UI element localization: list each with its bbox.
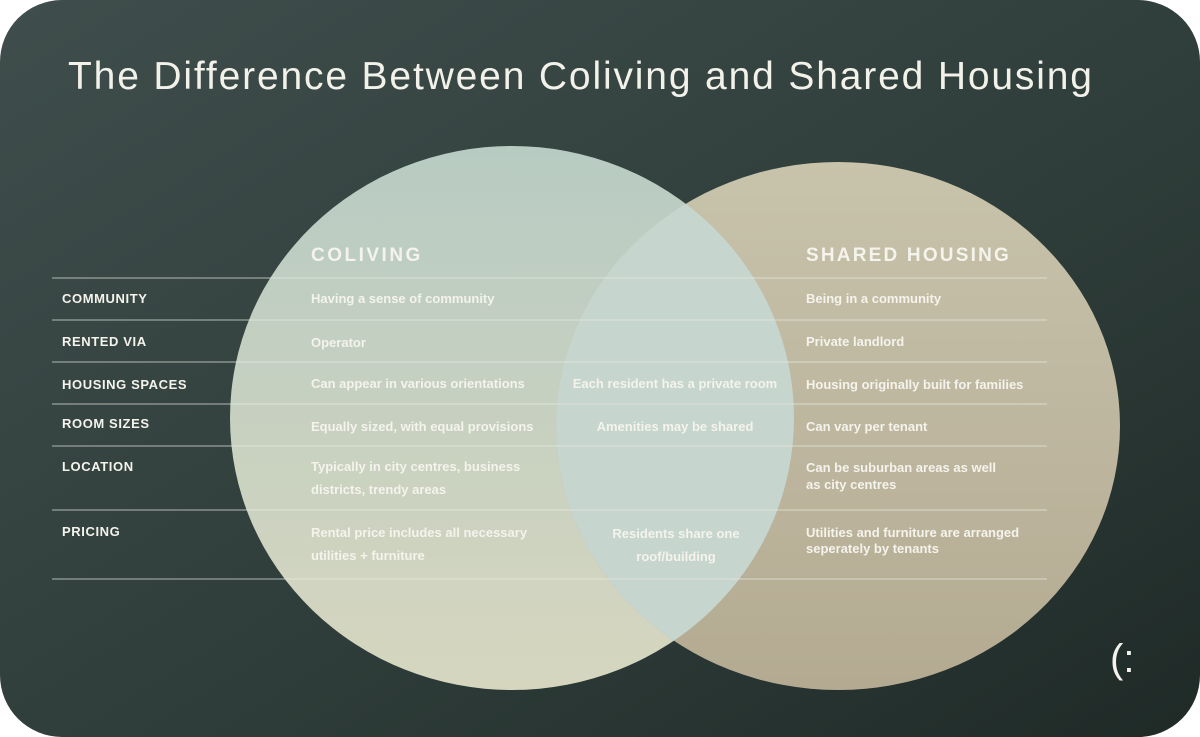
heading: coliving: COLIVING bbox=[311, 245, 423, 266]
shared housing column bbox=[806, 291, 1023, 556]
row labels: HOUSING SPACES bbox=[62, 377, 187, 392]
heading: shared housing: SHARED HOUSING bbox=[806, 245, 1011, 266]
coliving column: Operator bbox=[311, 335, 366, 350]
table lines bbox=[52, 278, 1047, 579]
shared housing column: Being in a community bbox=[806, 291, 942, 306]
coliving column: utilities + furniture bbox=[311, 548, 425, 563]
coliving column: districts, trendy areas bbox=[311, 482, 446, 497]
shared housing column: Private landlord bbox=[806, 334, 904, 349]
coliving column: Equally sized, with equal provisions bbox=[311, 419, 534, 434]
circle: coliving bbox=[230, 146, 794, 690]
shared column (overlap): roof/building bbox=[636, 549, 716, 564]
shared column (overlap): Each resident has a private room bbox=[573, 376, 777, 391]
row labels: RENTED VIA bbox=[62, 334, 147, 349]
shared column (overlap): Residents share one bbox=[612, 526, 740, 541]
shared housing column: Housing originally built for families bbox=[806, 377, 1023, 392]
shared housing column: as city centres bbox=[806, 477, 896, 492]
shared housing column: seperately by tenants bbox=[806, 541, 939, 556]
row labels bbox=[62, 291, 187, 539]
shared housing column: Utilities and furniture are arranged bbox=[806, 525, 1019, 540]
row labels: PRICING bbox=[62, 524, 120, 539]
shared housing column: Can vary per tenant bbox=[806, 419, 928, 434]
row labels: COMMUNITY bbox=[62, 291, 148, 306]
logo: (: bbox=[1110, 637, 1134, 681]
row labels: ROOM SIZES bbox=[62, 416, 150, 431]
coliving column: Having a sense of community bbox=[311, 291, 495, 306]
shared column (overlap) bbox=[573, 376, 777, 564]
row labels: LOCATION bbox=[62, 459, 134, 474]
coliving column: Typically in city centres, business bbox=[311, 459, 520, 474]
circle: shared housing bbox=[556, 162, 1120, 690]
overlap bbox=[556, 204, 794, 640]
venn diagram bbox=[230, 146, 1120, 690]
coliving column: Rental price includes all necessary bbox=[311, 525, 528, 540]
coliving column bbox=[311, 291, 534, 563]
shared column (overlap): Amenities may be shared bbox=[597, 419, 753, 434]
shared housing column: Can be suburban areas as well bbox=[806, 460, 996, 475]
title: The Difference Between Coliving and Shared Housing bbox=[68, 55, 1092, 98]
coliving column: Can appear in various orientations bbox=[311, 376, 525, 391]
